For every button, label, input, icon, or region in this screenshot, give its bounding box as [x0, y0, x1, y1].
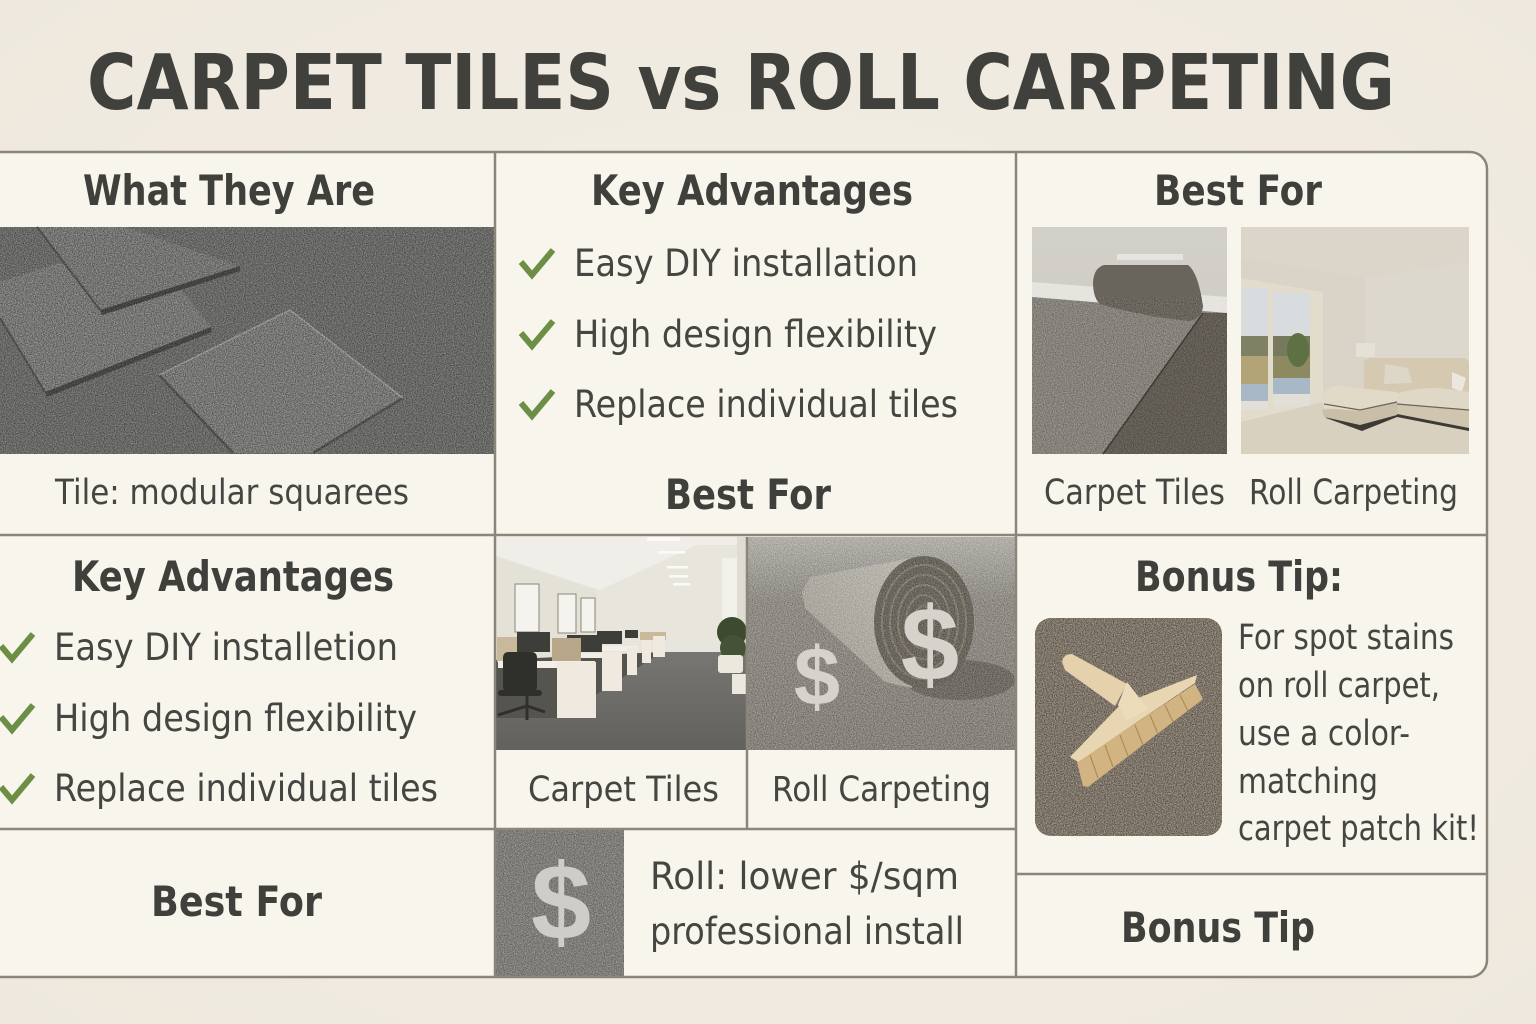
icon: dollar on carpet	[495, 830, 624, 976]
checklist: Replace individual tiles	[574, 383, 958, 426]
photo: carpet roll on floor	[1032, 227, 1227, 454]
caption: carpet tiles: Carpet Tiles	[528, 770, 719, 810]
caption: tile: Tile: modular squarees	[54, 473, 409, 513]
cost text: professional install	[650, 910, 964, 953]
icon: dollar on carpet: $	[531, 841, 591, 962]
panel: best for middle	[496, 537, 1015, 810]
tip text: use a color-	[1238, 714, 1410, 754]
photo: office with carpet tiles	[496, 537, 747, 750]
checklist: High design flexibility	[54, 697, 417, 740]
photo: living room	[1241, 227, 1469, 454]
heading: bonus tip: Bonus Tip:	[1135, 552, 1343, 601]
dollar sign large: $	[901, 586, 959, 703]
heading: bonus tip: Bonus Tip	[1121, 903, 1315, 952]
panel: best for top right	[1032, 166, 1469, 513]
panel: what they are	[0, 166, 494, 513]
dollar sign small: $	[794, 630, 840, 723]
heading: best for: Best For	[151, 877, 322, 926]
checklist: Easy DIY installetion	[54, 626, 398, 669]
photo: carpet roll with dollar signs	[748, 537, 1015, 750]
cost text: Roll: lower $/sqm	[650, 855, 959, 898]
tip text: carpet patch kit!	[1238, 809, 1479, 849]
panel: bonus tip	[1035, 552, 1479, 849]
plant	[717, 617, 747, 694]
cost text	[650, 855, 964, 953]
panel: key advantages left	[1, 552, 438, 810]
tip text: matching	[1238, 762, 1378, 802]
checklist	[1, 626, 438, 810]
heading: best for: Best For	[1154, 166, 1322, 215]
checklist: High design flexibility	[574, 313, 937, 356]
tip text: on roll carpet,	[1238, 666, 1440, 706]
panel: roll cost	[495, 830, 964, 976]
tip text	[1238, 618, 1479, 849]
caption: carpet tiles: Carpet Tiles	[1044, 473, 1225, 513]
heading: best for: Best For	[665, 470, 831, 519]
checklist: Easy DIY installation	[574, 242, 918, 285]
checklist: Replace individual tiles	[54, 767, 438, 810]
heading: key advantages: Key Advantages	[72, 552, 394, 601]
caption: roll carpeting: Roll Carpeting	[1249, 473, 1458, 513]
photo: carpet tiles close-up	[0, 227, 494, 454]
office chair	[498, 652, 545, 720]
heading: key advantages: Key Advantages	[591, 166, 913, 215]
caption: roll carpeting: Roll Carpeting	[772, 770, 991, 810]
photo: brush on carpet	[1035, 618, 1222, 836]
heading: what they are: What They Are	[83, 166, 375, 215]
panel: key advantages top	[521, 166, 958, 519]
comparison table	[0, 152, 1487, 977]
checklist	[521, 242, 958, 426]
tip text: For spot stains	[1238, 618, 1454, 658]
